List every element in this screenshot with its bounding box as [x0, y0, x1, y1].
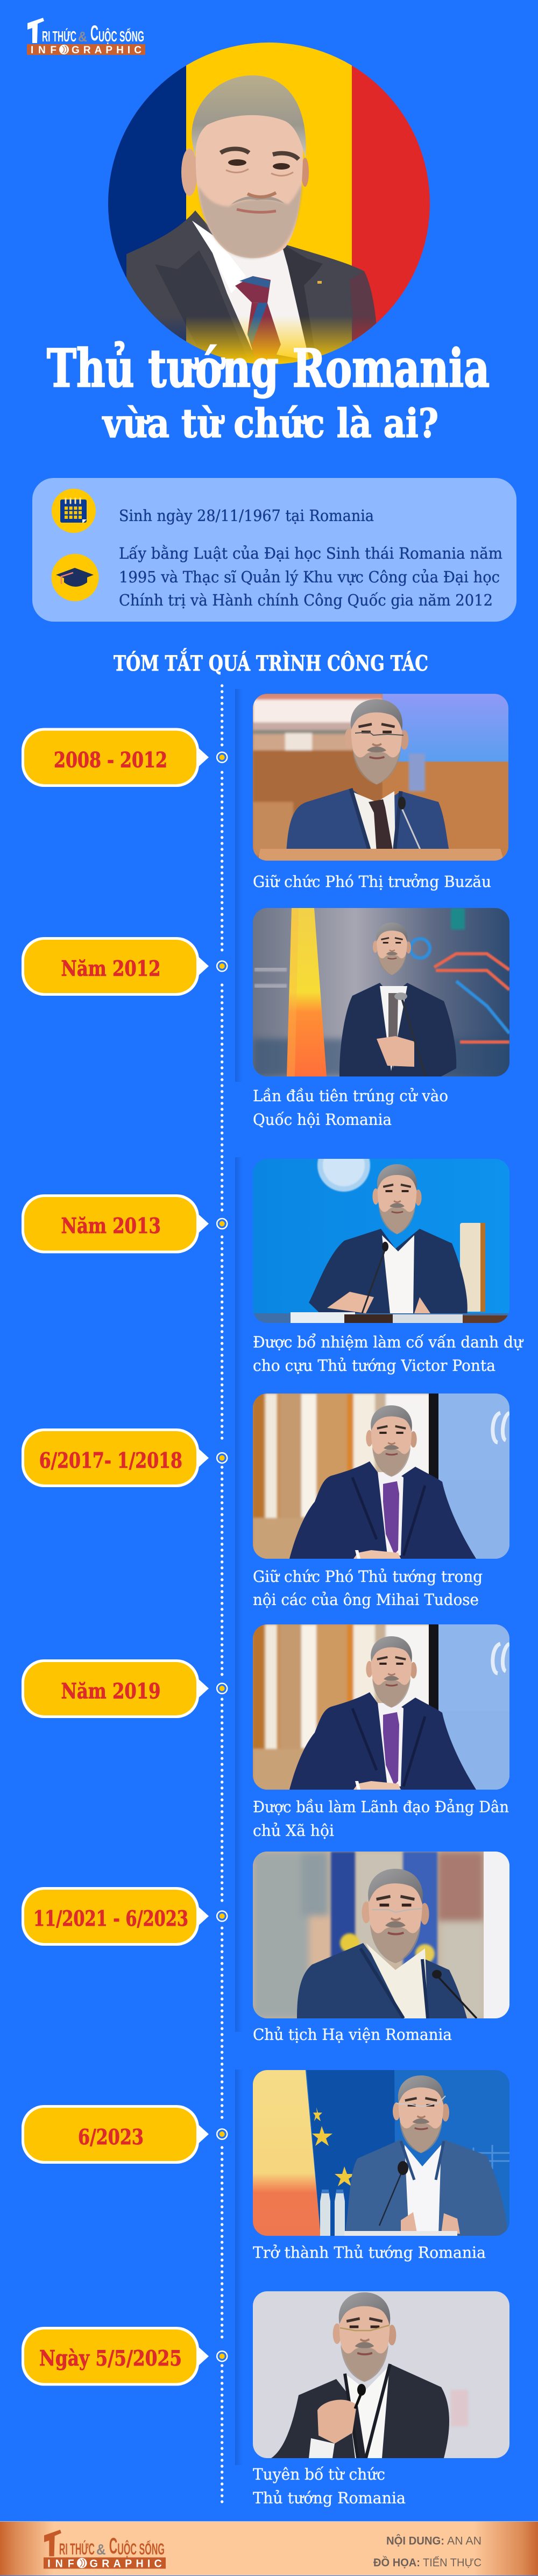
- date pill: [22, 2105, 209, 2164]
- caption: Được bầu làm Lãnh đạo Đảng Dân: [253, 1798, 509, 1816]
- flag: yellow stripe: [186, 42, 352, 365]
- timeline bullet: [217, 1219, 227, 1229]
- photo: speaking at podium: [253, 694, 508, 861]
- timeline bullet: [217, 961, 227, 971]
- logo: Tri Thức & Cuộc Sống Infographic: &: [78, 29, 87, 45]
- footer logo: [44, 2530, 166, 2570]
- flag: blue stripe: [108, 66, 186, 341]
- timeline bullet: [217, 2351, 227, 2361]
- date pill: [22, 2327, 209, 2385]
- caption: Lần đầu tiên trúng cử vào: [253, 1087, 448, 1105]
- footer logo: UỘC SỐNG: [117, 2540, 165, 2558]
- logo: Tri Thức & Cuộc Sống Infographic: [27, 18, 145, 56]
- logo: Tri Thức & Cuộc Sống Infographic: C: [90, 22, 98, 45]
- timeline bullet: [217, 1684, 227, 1693]
- timeline bullet: [217, 1453, 227, 1463]
- milestone 5: 2019: [22, 1624, 509, 1840]
- photo: at government desk: [253, 1159, 509, 1323]
- footer logo: INF: [47, 2558, 74, 2570]
- photo: press statement: [253, 908, 509, 1076]
- footer logo: RI THỨC: [59, 2540, 95, 2558]
- credit: graphics: [373, 2556, 482, 2569]
- caption: cho cựu Thủ tướng Victor Ponta: [253, 1356, 495, 1375]
- timeline shadow strips: [235, 689, 243, 2465]
- logo: Tri Thức & Cuộc Sống Infographic: UỘC SỐNG: [98, 27, 144, 45]
- date pill: [22, 937, 209, 996]
- logo: Tri Thức & Cuộc Sống Infographic: INF: [31, 45, 56, 56]
- text: birth: Sinh ngày 28/11/1967 tại Romania: [119, 506, 374, 525]
- hero portrait on Romanian flag circle: [108, 42, 430, 377]
- heading: career summary: TÓM TẮT QUÁ TRÌNH CÔNG TÁC: [114, 648, 428, 676]
- milestone 4: 6/2017 - 1/2018: [22, 1393, 509, 1609]
- credit: content: NỘI DUNG:: [386, 2534, 444, 2547]
- caption: chủ Xã hội: [253, 1821, 334, 1840]
- icon: calendar: [52, 489, 96, 533]
- caption: [253, 1087, 448, 1129]
- caption: [253, 1798, 509, 1840]
- milestone 7: 6/2023: [22, 2070, 509, 2262]
- date pill: 11/2021 - 6/2023: [33, 1906, 188, 1931]
- footer logo: &: [96, 2542, 106, 2558]
- date pill: Năm 2019: [61, 1679, 160, 1704]
- logo: Tri Thức & Cuộc Sống Infographic: GRAPHIC: [72, 45, 141, 56]
- milestone 6: 11/2021 - 6/2023: [22, 1852, 509, 2044]
- text: education: 1995 và Thạc sĩ Quản lý Khu vực Công của Đại học: [119, 568, 500, 586]
- caption: Giữ chức Phó Thủ tướng trong: [253, 1567, 483, 1586]
- milestone 1: 2008-2012: [22, 694, 508, 891]
- caption: [253, 2465, 406, 2507]
- footer logo: GRAPHIC: [90, 2558, 162, 2570]
- date pill: Ngày 5/5/2025: [39, 2346, 182, 2371]
- caption: [253, 1567, 483, 1609]
- photo: resignation announcement: [253, 2291, 509, 2458]
- milestone 8: 5/5/2025: [22, 2291, 509, 2507]
- timeline dotted line: [221, 686, 223, 2504]
- logo: Tri Thức & Cuộc Sống Infographic: RI THỨC: [42, 28, 76, 45]
- caption: Giữ chức Phó Thị trưởng Buzău: [253, 872, 491, 891]
- credit: graphics: ĐỒ HỌA:: [373, 2556, 420, 2569]
- timeline bullet: [217, 1911, 227, 1922]
- credit: graphics: TIẾN THỰC: [423, 2557, 482, 2569]
- title line 2: vừa từ chức là ai?: [102, 400, 438, 447]
- timeline bullet: [217, 752, 227, 762]
- date pill: [22, 1194, 209, 1253]
- date pill: [22, 1887, 209, 1946]
- date pill: Năm 2013: [61, 1214, 161, 1238]
- footer logo: C: [109, 2533, 117, 2558]
- credit: content: [386, 2534, 482, 2547]
- caption: [253, 1333, 523, 1375]
- caption: Trở thành Thủ tướng Romania: [253, 2243, 486, 2262]
- caption: Quốc hội Romania: [253, 1110, 392, 1129]
- date pill: [22, 1428, 209, 1487]
- man in suit: [126, 75, 377, 377]
- date pill: Năm 2012: [61, 956, 160, 981]
- timeline bullet: [217, 2129, 227, 2139]
- caption: Thủ tướng Romania: [253, 2489, 406, 2507]
- panel: personal profile: [32, 478, 516, 622]
- photo: prime minister: [253, 2070, 509, 2236]
- text: education: Lấy bằng Luật của Đại học Sinh thái Romania năm: [119, 544, 502, 562]
- caption: Chủ tịch Hạ viện Romania: [253, 2025, 452, 2044]
- milestone 3: 2013: [22, 1139, 523, 1375]
- date pill: 2008 - 2012: [54, 748, 167, 773]
- photo: chamber president: [253, 1852, 509, 2018]
- photo: deputy prime minister: [253, 1393, 509, 1561]
- date pill: 6/2017- 1/2018: [39, 1448, 182, 1473]
- caption: nội các của ông Mihai Tudose: [253, 1590, 479, 1609]
- flag: red stripe: [352, 66, 430, 341]
- date pill: [22, 1659, 209, 1718]
- milestone 2: 2012: [22, 908, 509, 1129]
- icon: graduation cap: [52, 554, 99, 601]
- caption: Được bổ nhiệm làm cố vấn danh dự: [253, 1333, 523, 1351]
- caption: Tuyên bố từ chức: [253, 2465, 385, 2483]
- credit: content: AN AN: [447, 2535, 482, 2547]
- photo: party leader: [253, 1624, 509, 1792]
- date pill: 6/2023: [78, 2125, 144, 2150]
- text: education: [119, 544, 502, 609]
- footer band: [0, 2521, 538, 2576]
- text: education: Chính trị và Hành chính Công Quốc gia năm 2012: [119, 591, 493, 609]
- date pill: [22, 728, 209, 787]
